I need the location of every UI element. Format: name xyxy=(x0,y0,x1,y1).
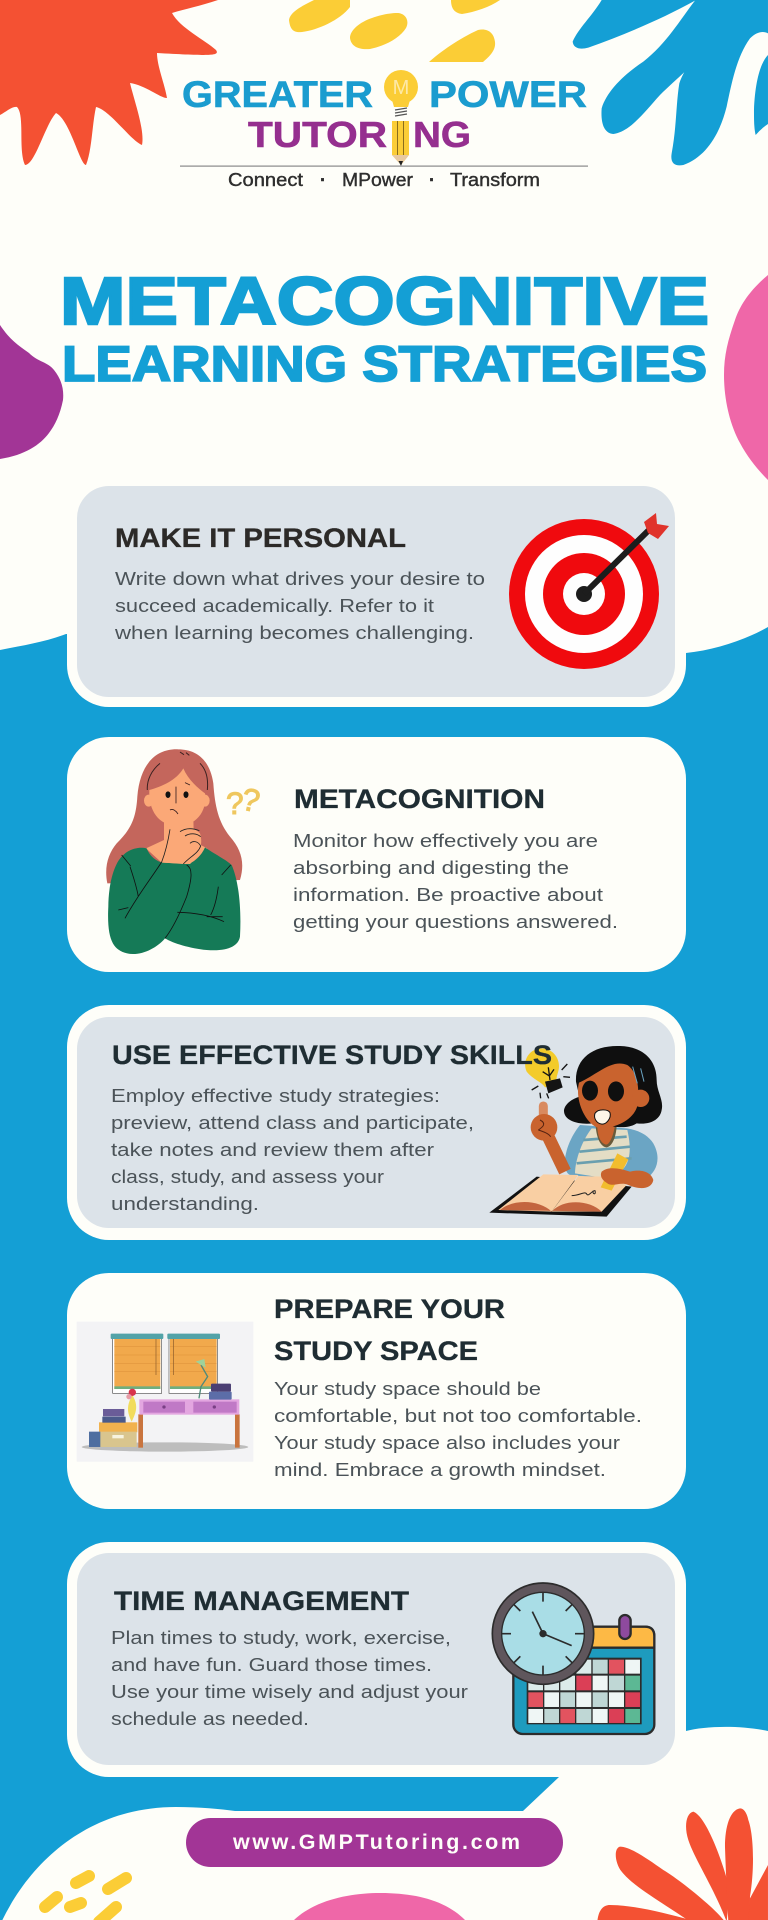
decoration: orange splat xyxy=(0,0,218,165)
heading: prepare your study space xyxy=(274,1294,505,1366)
body text: use effective study skills xyxy=(111,1085,474,1214)
icon: target with arrow xyxy=(509,513,669,669)
decoration: yellow dashes xyxy=(45,1876,126,1920)
logo: light bulb xyxy=(384,70,418,116)
panel: make it personal xyxy=(67,474,686,707)
decoration: blue hand shape xyxy=(573,0,768,165)
decoration: yellow blobs xyxy=(289,0,500,62)
panel: time management xyxy=(67,1542,686,1777)
body text: use effective study skills: understanding. xyxy=(111,1193,259,1214)
logo tagline: · xyxy=(320,170,326,190)
body text: metacognition: absorbing and digesting the xyxy=(293,857,569,878)
body text: use effective study skills: take notes and review them after xyxy=(111,1139,434,1160)
blue background band xyxy=(0,627,768,1920)
icon: question marks xyxy=(226,780,263,821)
website button xyxy=(186,1818,563,1867)
decoration: purple blob xyxy=(0,325,63,459)
logo tagline: MPower xyxy=(342,170,413,190)
title: METACOGNITIVE xyxy=(60,264,709,339)
decoration: pink blob xyxy=(724,275,768,480)
heading: time management: TIME MANAGEMENT xyxy=(114,1586,409,1616)
body text: prepare your study space: comfortable, but not too comfortable. xyxy=(274,1405,642,1426)
icon: question marks: ? xyxy=(226,785,244,821)
body text: make it personal: when learning becomes challenging. xyxy=(114,622,474,643)
body text: make it personal: Write down what drives your desire to xyxy=(115,568,485,589)
heading: make it personal: MAKE IT PERSONAL xyxy=(115,523,406,553)
heading: metacognition: METACOGNITION xyxy=(294,784,545,814)
body text: time management: schedule as needed. xyxy=(111,1708,309,1729)
logo: GREATER xyxy=(182,74,373,115)
website button: www.GMPTutoring.com xyxy=(232,1830,520,1854)
illustration: thinking woman xyxy=(106,749,263,954)
body text: use effective study skills: preview, attend class and participate, xyxy=(111,1112,474,1133)
illustration: desk and windows xyxy=(77,1322,253,1462)
illustration: girl with light bulb and book xyxy=(489,1046,662,1217)
logo tagline: Connect xyxy=(228,170,303,190)
logo: light bulb: M xyxy=(393,77,409,99)
panel: prepare your study space xyxy=(67,1273,686,1509)
body text: prepare your study space xyxy=(274,1378,642,1480)
body text: prepare your study space: mind. Embrace a growth mindset. xyxy=(274,1459,606,1480)
icon: question marks: ? xyxy=(238,780,263,819)
panel: use effective study skills xyxy=(67,1005,686,1240)
logo: pencil xyxy=(392,121,409,166)
logo xyxy=(180,70,588,190)
body text: use effective study skills: Employ effective study strategies: xyxy=(111,1085,440,1106)
logo tagline: · xyxy=(429,170,435,190)
body text: make it personal xyxy=(114,568,485,643)
body text: make it personal: succeed academically. Refer to it xyxy=(115,595,434,616)
body text: prepare your study space: Your study space also includes your xyxy=(274,1432,620,1453)
panel: metacognition xyxy=(67,737,686,972)
heading: use effective study skills: USE EFFECTIVE STUDY SKILLS xyxy=(112,1040,552,1070)
body text: time management: Use your time wisely and adjust your xyxy=(111,1681,468,1702)
heading: prepare your study space: STUDY SPACE xyxy=(274,1336,478,1366)
body text: time management: and have fun. Guard those times. xyxy=(111,1654,432,1675)
cream bottom shape xyxy=(0,1727,768,1920)
body text: time management: Plan times to study, work, exercise, xyxy=(111,1627,451,1648)
decoration: pink blob bottom xyxy=(294,1893,465,1920)
body text: metacognition xyxy=(293,830,618,932)
title: LEARNING STRATEGIES xyxy=(62,336,707,392)
logo: POWER xyxy=(429,74,587,115)
body text: time management xyxy=(111,1627,468,1729)
decoration: orange flower xyxy=(597,1808,768,1920)
logo: TUTOR xyxy=(248,114,387,155)
body text: metacognition: getting your questions answered. xyxy=(293,911,618,932)
logo: NG xyxy=(413,114,471,155)
logo tagline xyxy=(228,170,540,190)
body text: metacognition: information. Be proactive about xyxy=(293,884,603,905)
logo tagline: Transform xyxy=(450,170,540,190)
title xyxy=(60,264,709,392)
body text: prepare your study space: Your study space should be xyxy=(274,1378,541,1399)
body text: metacognition: Monitor how effectively you are xyxy=(293,830,598,851)
icon: clock and calendar xyxy=(492,1583,654,1734)
heading: prepare your study space: PREPARE YOUR xyxy=(274,1294,505,1324)
body text: use effective study skills: class, study, and assess your xyxy=(111,1166,384,1187)
